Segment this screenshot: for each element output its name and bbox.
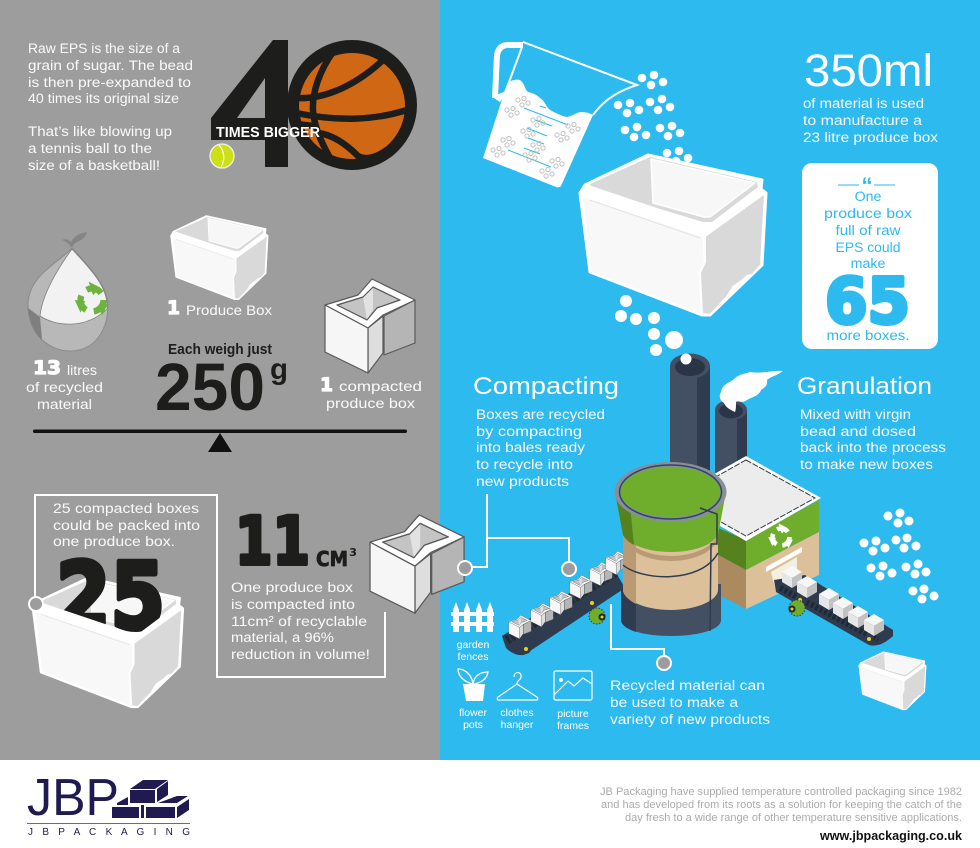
text block: raw EPS explanation: a tennis ball to the <box>28 141 152 157</box>
logo letters: JBP <box>27 769 119 827</box>
illustration: large produce box <box>580 155 766 315</box>
label: picture frames <box>557 708 589 732</box>
label: 1 compacted produce box: produce box <box>326 396 415 412</box>
text block: compacting <box>476 407 605 490</box>
icon: garden fence <box>451 602 494 632</box>
text block: compaction explanation: 11cm² of recyclable <box>231 614 367 630</box>
label: 1 produce box: 1 <box>167 297 180 319</box>
text block: compacting: into bales ready <box>476 440 586 456</box>
text block: raw EPS explanation: is then pre-expanded to <box>28 75 191 91</box>
quote text <box>824 189 912 272</box>
heading: granulation: Granulation <box>797 373 932 400</box>
label: 13 litres of recycled material <box>26 357 103 413</box>
label: flower pots <box>459 707 488 731</box>
heading: compacting: Compacting <box>473 373 619 400</box>
text block: compaction explanation <box>231 580 370 663</box>
heading: 11cm3: 3 <box>349 546 357 559</box>
label: 1 compacted produce box: compacted <box>339 379 422 395</box>
label: picture frames: picture <box>557 708 589 720</box>
quote text: One <box>855 189 882 205</box>
heading: 350ml: 350ml <box>804 45 933 96</box>
heading: 11cm3: 11 <box>235 503 310 580</box>
text block: recycled material uses: variety of new products <box>610 712 770 728</box>
quote text: make <box>851 256 885 272</box>
text block: 25 compacted boxes: 25 compacted boxes <box>53 501 199 517</box>
storage tank <box>614 462 726 636</box>
bracket frame linking 25 and 11cm <box>35 495 385 677</box>
label: 1 produce box <box>167 297 272 319</box>
text block: material used: 23 litre produce box <box>803 130 938 146</box>
text block: granulation: Mixed with virgin <box>800 407 911 423</box>
label: garden fences <box>457 639 490 663</box>
text block: recycled material uses: be used to make a <box>610 695 738 711</box>
illustration: compacted produce box <box>325 279 415 373</box>
icon: recycling bag <box>28 232 108 351</box>
quote text: produce box <box>824 206 912 222</box>
text block: granulation: back into the process <box>800 440 946 456</box>
icon: clothes hanger <box>497 672 538 700</box>
text block: company description: day fresh to a wide range of other temperature sensitive applications. <box>625 812 962 824</box>
text block: compacting: Boxes are recycled <box>476 407 605 423</box>
text block: raw EPS explanation: size of a basketball! <box>28 158 160 174</box>
text block: 25 compacted boxes: one produce box. <box>53 534 175 550</box>
label: clothes hanger: hanger <box>501 719 534 731</box>
label: 13 litres of recycled material: litres <box>67 363 97 379</box>
text block: 25 compacted boxes: could be packed into <box>53 518 200 534</box>
text block: granulation <box>800 407 946 473</box>
tall chimney <box>670 354 710 491</box>
label: 1 compacted produce box: 1 <box>320 374 333 396</box>
graphic: 40 times bigger with basketball and tennis ball <box>210 40 417 170</box>
label: 1 compacted produce box <box>320 374 422 412</box>
text block: recycled material uses: Recycled material can <box>610 678 765 694</box>
text block: compaction explanation: One produce box <box>231 580 353 596</box>
icon: flower pot <box>458 669 488 701</box>
right conveyor belt <box>774 566 893 646</box>
heading: each weigh just 250g: 250 <box>155 350 265 425</box>
text block: compaction explanation: material, a 96% <box>231 630 334 646</box>
smoke <box>720 371 783 412</box>
label: flower pots: flower <box>459 707 488 719</box>
text block: granulation: bead and dosed <box>800 424 916 440</box>
quote text: full of raw <box>836 223 901 239</box>
text block: compacting: by compacting <box>476 424 582 440</box>
label: 1 produce box: Produce Box <box>186 303 272 319</box>
connector dot on box <box>29 597 43 611</box>
factory building <box>672 456 821 609</box>
logo blocks <box>112 780 189 818</box>
label: clothes hanger: clothes <box>500 707 534 719</box>
illustration: new produce box <box>859 652 926 710</box>
illustration: recycling plant <box>502 354 893 655</box>
text block: raw EPS explanation: 40 times its original size <box>28 91 179 107</box>
text block: recycled material uses <box>610 678 770 728</box>
tennis ball <box>210 144 234 168</box>
text block: granulation: to make new boxes <box>800 457 933 473</box>
beads falling into box <box>614 71 692 165</box>
connector lines from compacted box to conveyor <box>458 494 576 576</box>
illustration: box containing the number 25 <box>33 543 183 707</box>
text block: material used <box>803 96 938 146</box>
label: 13 litres of recycled material: of recycled <box>26 380 103 396</box>
label: clothes hanger <box>500 707 534 731</box>
heading: 11cm3: CM <box>316 547 348 571</box>
beads falling out of box <box>615 295 683 356</box>
label: picture frames: frames <box>557 720 589 732</box>
label: times bigger: TIMES BIGGER <box>216 125 321 141</box>
logo: JB Packaging <box>27 769 190 838</box>
text block: compaction explanation: is compacted into <box>231 597 355 613</box>
label: garden fences: fences <box>458 651 488 663</box>
illustration: box containing the number 25: 25 <box>56 543 165 650</box>
panel: quote card 65 more boxes <box>802 163 938 349</box>
text block: 25 compacted boxes <box>53 501 200 550</box>
quote mark: “ <box>862 173 872 198</box>
balance scale <box>33 430 407 452</box>
basketball <box>287 40 417 170</box>
text block: raw EPS explanation: grain of sugar. The bead <box>28 58 193 74</box>
panel: blue right background <box>440 0 980 760</box>
text block: compacting: to recycle into <box>476 457 573 473</box>
text block: company description <box>600 786 962 824</box>
heading: each weigh just 250g: Each weigh just <box>168 342 272 358</box>
panel: white footer <box>0 760 980 848</box>
number 65: 65 <box>825 265 910 338</box>
panel: grey left background <box>0 0 440 760</box>
text block: raw EPS explanation <box>28 41 193 174</box>
quote text: EPS could <box>836 240 900 256</box>
text block: raw EPS explanation: Raw EPS is the size of a <box>28 41 180 57</box>
label: flower pots: pots <box>463 719 483 731</box>
illustration: measuring jug pouring beads <box>483 42 637 187</box>
text block: material used: of material is used <box>803 96 924 112</box>
text block: company description: and has developed from its roots as a solution for keeping the catch of the <box>601 799 962 811</box>
illustration: produce box <box>171 216 268 299</box>
beads from granulation <box>860 508 938 604</box>
closing text: more boxes. <box>826 328 910 344</box>
text block: company description: JB Packaging have supplied temperature controlled packaging since 1982 <box>600 786 962 798</box>
label: 13 litres of recycled material: 13 <box>33 357 61 379</box>
short chimney <box>715 400 747 480</box>
label: garden fences: garden <box>457 639 490 651</box>
heading: each weigh just 250g: g <box>270 353 288 386</box>
website address: www.jbpackaging.co.uk <box>819 829 962 843</box>
logo strapline: J B P A C K A G I N G <box>28 827 190 838</box>
left conveyor belt <box>502 551 628 655</box>
text block: compacting: new products <box>476 474 569 490</box>
illustration: compacted box crossing the panels <box>370 515 464 613</box>
text block: material used: to manufacture a <box>803 113 922 129</box>
icon: picture frame <box>554 671 592 700</box>
text block: raw EPS explanation: That’s like blowing up <box>28 124 172 140</box>
connector line from plant to reuse text <box>611 604 671 670</box>
label: 13 litres of recycled material: material <box>37 397 92 413</box>
text block: compaction explanation: reduction in volume! <box>231 647 370 663</box>
number four <box>211 40 288 167</box>
